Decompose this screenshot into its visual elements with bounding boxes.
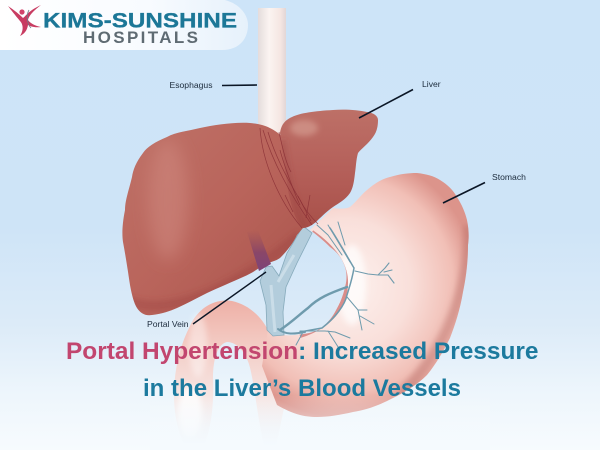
label: Stomach: Stomach bbox=[492, 172, 526, 182]
stomach bbox=[262, 173, 469, 417]
title bbox=[66, 338, 538, 402]
liver right lobe bbox=[280, 110, 378, 228]
label: Portal Vein bbox=[147, 272, 266, 329]
liver left lobe bbox=[122, 123, 310, 315]
gastric veins bbox=[278, 222, 394, 350]
title: Portal Hypertension: Increased Pressure bbox=[66, 338, 538, 365]
label: Portal Vein: Portal Vein bbox=[147, 319, 189, 329]
portal vein bbox=[260, 226, 312, 336]
organ illustration bbox=[122, 8, 469, 418]
label: Liver bbox=[359, 79, 441, 118]
logo name: KIMS-SUNSHINE bbox=[43, 10, 237, 32]
label: Esophagus bbox=[170, 80, 257, 90]
esophagus bbox=[258, 8, 286, 136]
duodenum bbox=[174, 300, 285, 445]
esophagus veins crossing liver bbox=[260, 128, 318, 228]
label: Liver: Liver bbox=[422, 79, 441, 89]
label: Stomach bbox=[443, 172, 526, 203]
purple vein inside liver bbox=[247, 230, 271, 271]
logo panel bbox=[0, 0, 248, 50]
logo icon: figure bbox=[8, 5, 41, 36]
logo subtitle: HOSPITALS bbox=[83, 28, 198, 47]
bottom fade over organs bbox=[150, 395, 490, 450]
title: in the Liver’s Blood Vessels bbox=[143, 375, 461, 402]
label: Esophagus: Esophagus bbox=[170, 80, 213, 90]
